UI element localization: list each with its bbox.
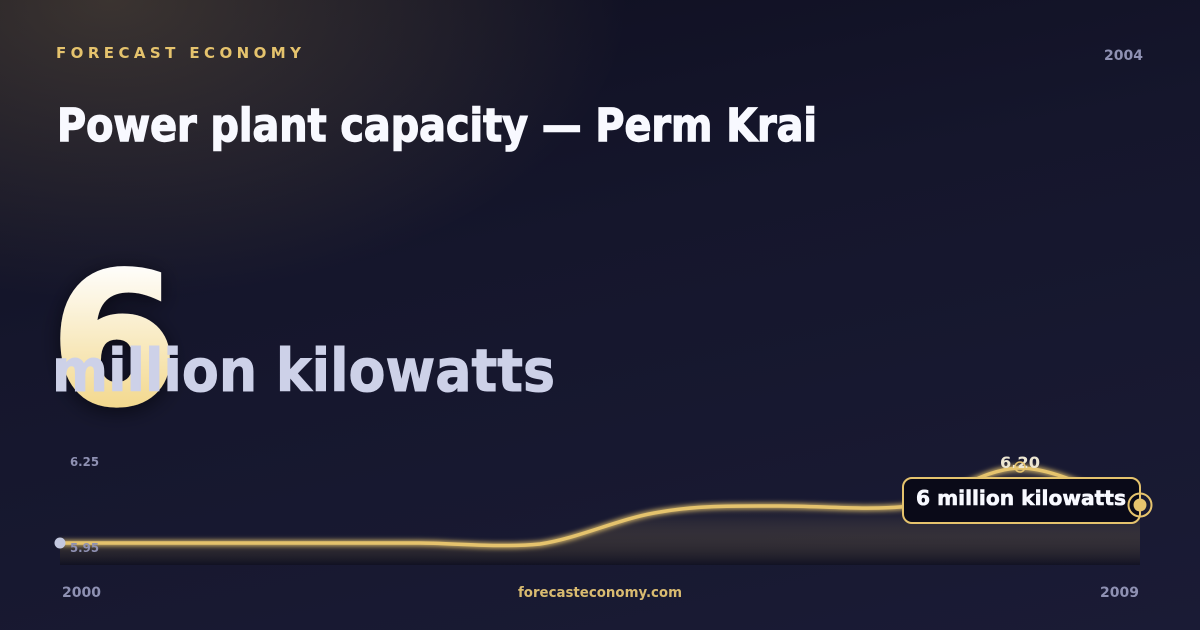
callout: 6 million kilowatts [916,486,1126,510]
callout [903,478,1140,523]
big number 6: 6 [51,234,178,446]
eyebrow: brand: FORECAST ECONOMY [56,44,302,62]
peak label: 6.20 [1000,453,1040,472]
area under line [60,468,1140,565]
peak marker [1015,462,1025,472]
unit text: million kilowatts [52,336,555,405]
trend line [60,468,1140,546]
axis label min: 5.95 [70,541,99,555]
x axis start: 2000 [62,585,101,601]
source link: forecasteconomy.com [518,585,682,601]
end point marker [1128,494,1152,516]
start point [54,538,66,548]
x axis end: 2009 [1100,585,1139,601]
axis label max: 6.25 [70,455,99,469]
title: Power plant capacity — Perm Krai [57,99,817,152]
year label: 2004 [1104,48,1143,64]
line glow [60,468,1140,546]
chart [54,453,1152,565]
